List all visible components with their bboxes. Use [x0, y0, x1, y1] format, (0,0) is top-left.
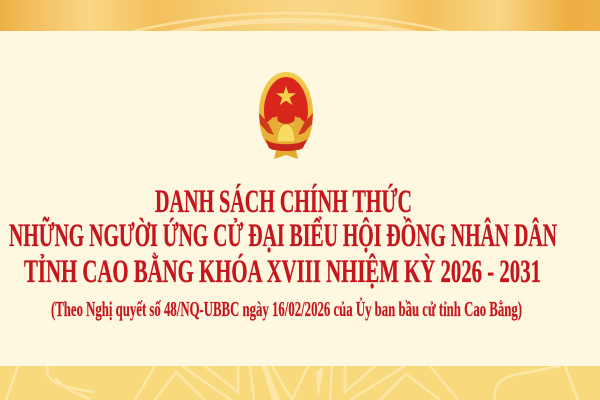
emblem gold dragons: [267, 116, 305, 135]
emblem star: [276, 86, 296, 105]
emblem cogwheel: [277, 124, 295, 142]
emblem bottom banner: [265, 139, 307, 151]
emblem gold outer wreath: [259, 72, 313, 159]
title line 1: DANH SÁCH CHÍNH THỨC: [155, 182, 412, 220]
emblem side ribbons: [259, 113, 313, 135]
top decorative band: [0, 0, 600, 33]
emblem red field: [264, 77, 308, 124]
icon: national emblem of Vietnam: [259, 72, 313, 159]
bottom decorative band: [0, 366, 600, 400]
title block: [9, 182, 557, 321]
